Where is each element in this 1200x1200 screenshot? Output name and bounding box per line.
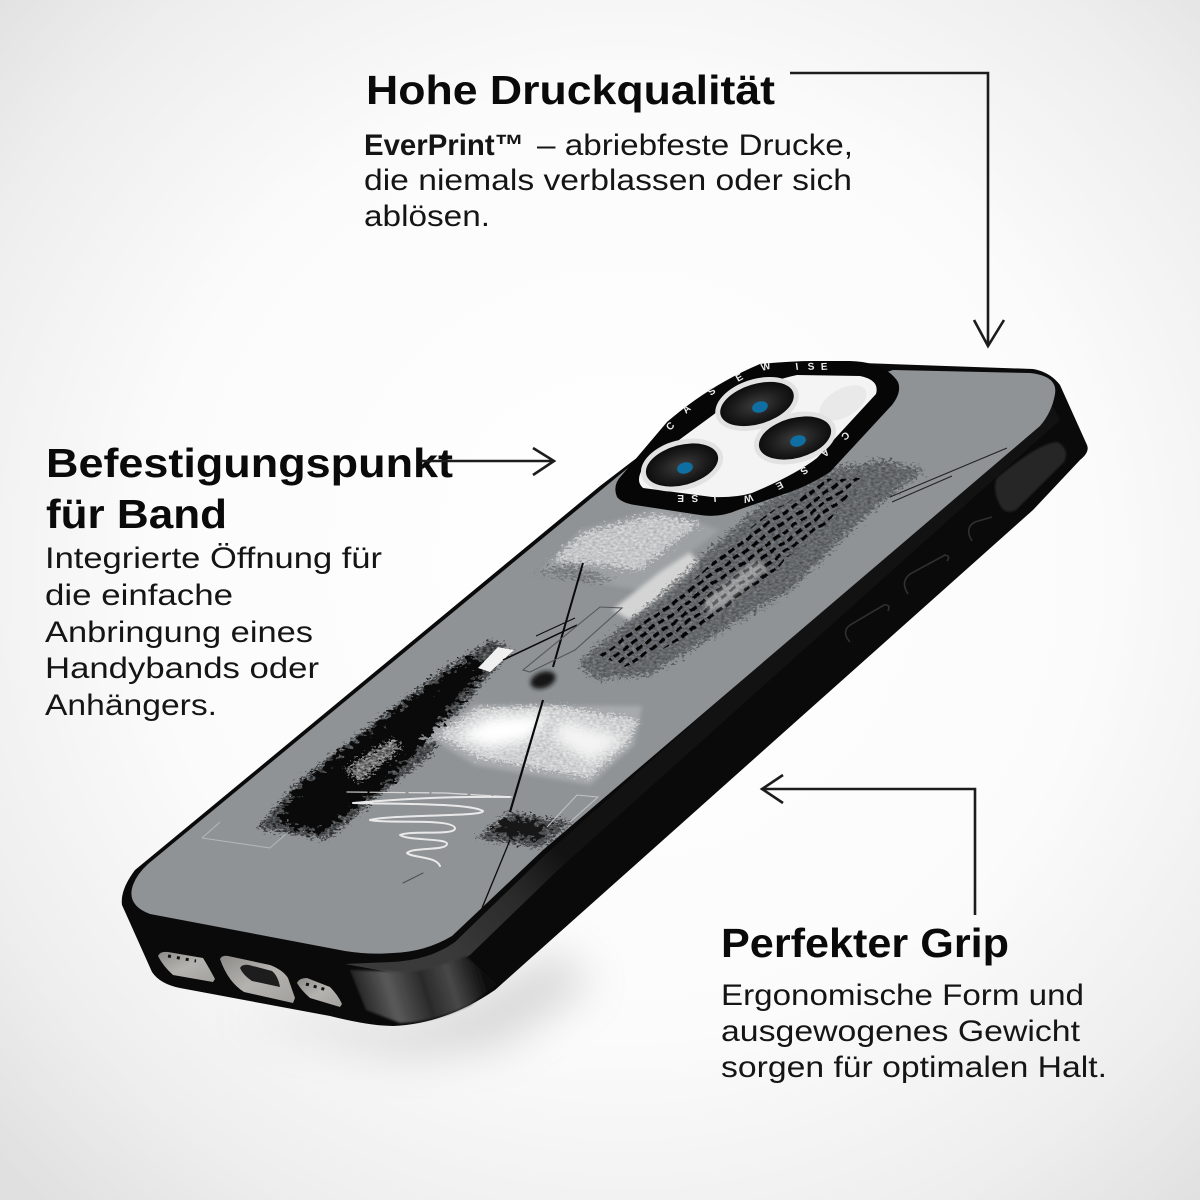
big black brush stroke bbox=[257, 640, 512, 840]
body text: Ergonomische Form und bbox=[721, 979, 1084, 1012]
plate highlight bbox=[813, 378, 873, 428]
arrow: grip bbox=[762, 775, 975, 915]
body text bbox=[721, 979, 1107, 1084]
case body bbox=[122, 362, 1088, 1026]
heading: Perfekter Grip bbox=[721, 920, 1009, 966]
heading: Hohe Druckqualität bbox=[366, 67, 775, 113]
phone case bbox=[122, 361, 1088, 1026]
side buttons bbox=[846, 517, 992, 642]
body text: sorgen für optimalen Halt. bbox=[721, 1051, 1107, 1084]
black blob bbox=[528, 668, 558, 692]
body text: die niemals verblassen oder sich bbox=[364, 164, 852, 197]
body text: – abriebfeste Drucke, bbox=[537, 129, 853, 162]
lens right bbox=[748, 403, 842, 473]
body text: Anhängers. bbox=[45, 689, 217, 722]
body text: die einfache bbox=[45, 579, 233, 612]
body text: ablösen. bbox=[364, 200, 490, 233]
camera island bbox=[615, 361, 899, 516]
bottom ports bbox=[158, 952, 342, 1007]
charging port bbox=[220, 956, 295, 1003]
white camera plate bbox=[639, 375, 877, 497]
hazy grey smears bbox=[540, 508, 720, 590]
white squiggle bbox=[347, 792, 512, 883]
body text: EverPrint™ bbox=[364, 129, 524, 162]
dash print fine outline strokes bbox=[890, 448, 1007, 502]
callout: print quality bbox=[364, 67, 853, 233]
arrow: print quality bbox=[790, 73, 1004, 346]
brand text bottom: CASEWISE bbox=[677, 429, 851, 504]
phone drop shadow bbox=[230, 950, 590, 1055]
heading: für Band bbox=[46, 491, 227, 537]
small black brush stroke bbox=[477, 812, 572, 848]
body text: Integrierte Öffnung für bbox=[45, 542, 382, 575]
screen back panel bbox=[131, 370, 1055, 954]
glossy corner reflection bbox=[350, 956, 497, 1023]
bottom white smear bbox=[438, 706, 640, 778]
arrow: strap attachment bbox=[421, 448, 554, 475]
body text: Anbringung eines bbox=[45, 616, 313, 649]
thin outline rectangles bbox=[202, 607, 622, 848]
abstract print artwork bbox=[202, 448, 1007, 908]
camera bezel bbox=[615, 361, 899, 516]
body text bbox=[364, 129, 853, 233]
callout: grip bbox=[721, 920, 1107, 1084]
right speaker grille bbox=[297, 978, 342, 1007]
top white smear bbox=[552, 515, 700, 570]
thin black diagonal lines bbox=[482, 563, 583, 908]
side grip patch bbox=[995, 442, 1066, 512]
side sheen bbox=[345, 405, 1060, 974]
halftone dash print bbox=[578, 460, 925, 680]
body text bbox=[45, 542, 382, 722]
body text: Handybands oder bbox=[45, 652, 319, 685]
lens left bbox=[635, 430, 729, 500]
lens top bbox=[709, 368, 805, 440]
brand text top: CASEWISE bbox=[664, 361, 828, 433]
left speaker grille bbox=[158, 952, 215, 982]
heading: Befestigungspunkt bbox=[46, 440, 453, 486]
callout: strap attachment bbox=[45, 440, 453, 722]
body text: ausgewogenes Gewicht bbox=[721, 1015, 1080, 1048]
heading bbox=[46, 440, 453, 537]
